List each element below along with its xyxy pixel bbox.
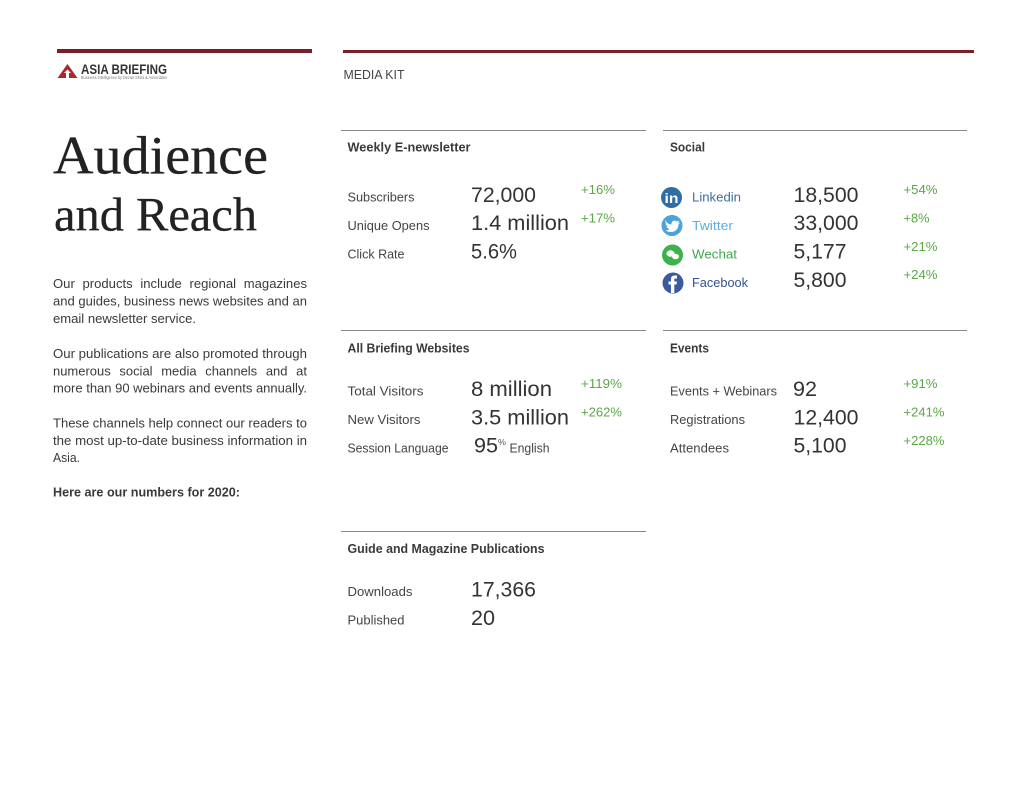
panel: all briefing websites: +119% [581,377,622,391]
panel: events: Events [670,340,709,356]
logo: Asia Briefing: Business Intelligence by Dezan Shira & Associates [81,75,168,80]
title: and Reach [54,188,257,242]
panel: social: +24% [904,268,938,282]
panel: social: +8% [904,212,930,226]
panel: events: 92 [793,377,817,401]
panel: all briefing websites: 95 [474,434,498,458]
panel: social: +54% [904,183,938,197]
panel: events [663,330,967,458]
intro text block: Asia. [53,450,80,465]
panel: social [661,130,967,294]
panel: all briefing websites: 3.5 million [471,405,569,429]
intro text block: Our publications are also promoted through [53,346,307,361]
panel: weekly e-newsletter: Subscribers [348,190,415,205]
panel: guide and magazine publications: 17,366 [471,578,536,602]
panel: all briefing websites: All Briefing Websites [348,340,470,356]
icon: twitter [662,215,682,236]
intro text block: Here are our numbers for 2020: [53,484,240,500]
right header bar [343,50,974,53]
panel: weekly e-newsletter: Unique Opens [348,218,430,233]
panel: social: +21% [904,240,938,254]
intro text block: more than 90 webinars and events annually. [53,380,307,396]
panel: all briefing websites: 8 million [471,377,552,401]
panel: social: 5,800 [794,268,847,292]
intro text block: and guides, business news websites and an [53,294,307,308]
panel: events: +241% [904,406,944,420]
panel: social: 33,000 [794,211,859,235]
panel: social: 18,500 [794,183,859,207]
intro text block: email newsletter service. [53,311,196,326]
panel: all briefing websites: Session Language [348,440,448,456]
panel: weekly e-newsletter: +17% [581,212,615,226]
panel: all briefing websites [341,330,646,458]
intro text block: Our products include regional magazines [53,276,307,291]
panel: weekly e-newsletter [341,130,646,264]
panel: weekly e-newsletter: Weekly E-newsletter [348,140,471,154]
panel: events: Attendees [670,440,730,456]
panel: all briefing websites: +262% [581,406,622,420]
panel: social: 5,177 [794,240,846,264]
panel: guide and magazine publications: Downloads [348,584,413,599]
panel: weekly e-newsletter: 72,000 [471,183,536,207]
panel: all briefing websites: Total Visitors [348,384,424,398]
panel: guide and magazine publications: Guide and Magazine Publications [348,541,544,556]
panel: events: +228% [904,434,944,448]
media kit label: MEDIA KIT [344,67,405,82]
panel: social: Twitter [692,218,734,233]
panel: guide and magazine publications [341,531,646,630]
panel: all briefing websites: English [510,440,550,456]
icon: linkedin: in [664,190,678,206]
panel: guide and magazine publications: Published [348,612,404,628]
panel: weekly e-newsletter: Click Rate [348,247,404,262]
panel: events: Events + Webinars [670,384,777,398]
left header bar [57,49,312,53]
panel: social: Facebook [692,275,748,290]
panel: weekly e-newsletter: 1.4 million [471,211,569,235]
panel: events: 12,400 [794,405,859,429]
logo: Asia Briefing: ASIA BRIEFING [81,62,167,77]
panel: all briefing websites: % [498,438,506,447]
logo: Asia Briefing [58,62,168,80]
intro text block: numerous social media channels and at [53,364,307,378]
icon: wechat [662,244,683,266]
title [53,126,268,242]
panel: social: Linkedin [692,190,741,205]
title: Audience [53,126,268,186]
panel: events: +91% [904,377,938,391]
panel: guide and magazine publications: 20 [471,606,495,630]
panel: weekly e-newsletter: 5.6% [471,240,517,264]
icon: linkedin [661,187,682,208]
panel: social: Wechat [692,247,737,262]
panel: events: 5,100 [794,434,847,458]
intro text block [53,276,307,500]
panel: weekly e-newsletter: +16% [581,183,615,197]
icon: facebook [662,272,684,294]
panel: all briefing websites: New Visitors [348,412,421,427]
intro text block: the most up-to-date business information in [53,433,307,448]
panel: events: Registrations [670,412,745,427]
panel: social: Social [670,140,705,154]
intro text block: These channels help connect our readers to [53,416,307,430]
